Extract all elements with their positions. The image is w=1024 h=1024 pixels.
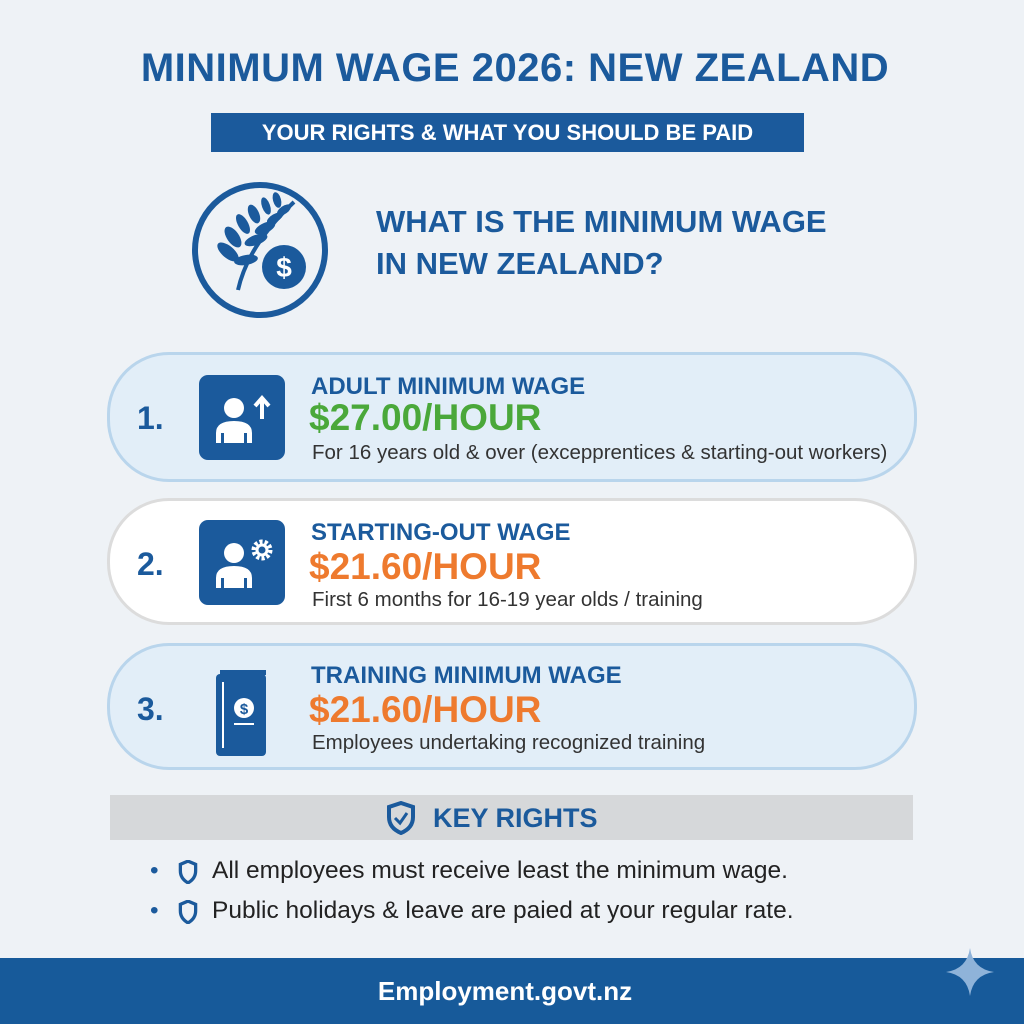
card 1: adult minimum wage: For 16 years old & over (excepprentices & starting-out workers) (312, 441, 887, 464)
footer (0, 958, 1024, 1024)
key rights list: • (150, 897, 159, 924)
title: MINIMUM WAGE 2026: NEW ZEALAND (141, 46, 889, 90)
key rights header band (110, 795, 913, 840)
icon: sparkle (946, 948, 994, 996)
card 3: training minimum wage: 3. (137, 691, 164, 727)
icon: person with gear (199, 520, 285, 605)
card 3: training minimum wage (107, 643, 917, 770)
card 3: training minimum wage: $21.60/HOUR (309, 689, 541, 730)
icon: book with dollar (216, 670, 266, 756)
card 1: adult minimum wage: $27.00/HOUR (309, 397, 541, 438)
icon: fern and dollar (192, 182, 328, 318)
icon: fern and dollar: $ (276, 252, 292, 283)
icon: shield check (387, 801, 415, 835)
subtitle banner (211, 113, 804, 152)
card 1: adult minimum wage (107, 352, 917, 482)
card 2: starting-out wage: 2. (137, 546, 164, 582)
icon: book with dollar: $ (240, 701, 249, 718)
card 2: starting-out wage: First 6 months for 16-19 year olds / training (312, 588, 703, 611)
key rights list (150, 857, 794, 924)
key rights header band: KEY RIGHTS (433, 803, 598, 833)
card 3: training minimum wage: TRAINING MINIMUM WAGE (311, 662, 622, 689)
key rights list: Public holidays & leave are paied at your regular rate. (212, 897, 794, 924)
icon: person with arrow (199, 375, 285, 460)
subtitle banner: YOUR RIGHTS & WHAT YOU SHOULD BE PAID (262, 120, 753, 145)
card 3: training minimum wage: Employees undertaking recognized training (312, 731, 705, 754)
card 1: adult minimum wage: ADULT MINIMUM WAGE (311, 373, 585, 400)
card 2: starting-out wage: $21.60/HOUR (309, 546, 541, 587)
question heading: IN NEW ZEALAND? (376, 246, 664, 281)
card 2: starting-out wage: STARTING-OUT WAGE (311, 519, 571, 546)
key rights list: All employees must receive least the minimum wage. (212, 857, 788, 884)
card 2: starting-out wage (107, 498, 917, 625)
key rights list: • (150, 857, 159, 884)
question heading: WHAT IS THE MINIMUM WAGE (376, 204, 827, 239)
question heading (376, 204, 827, 281)
card 1: adult minimum wage: 1. (137, 400, 164, 436)
footer: Employment.govt.nz (378, 976, 632, 1006)
